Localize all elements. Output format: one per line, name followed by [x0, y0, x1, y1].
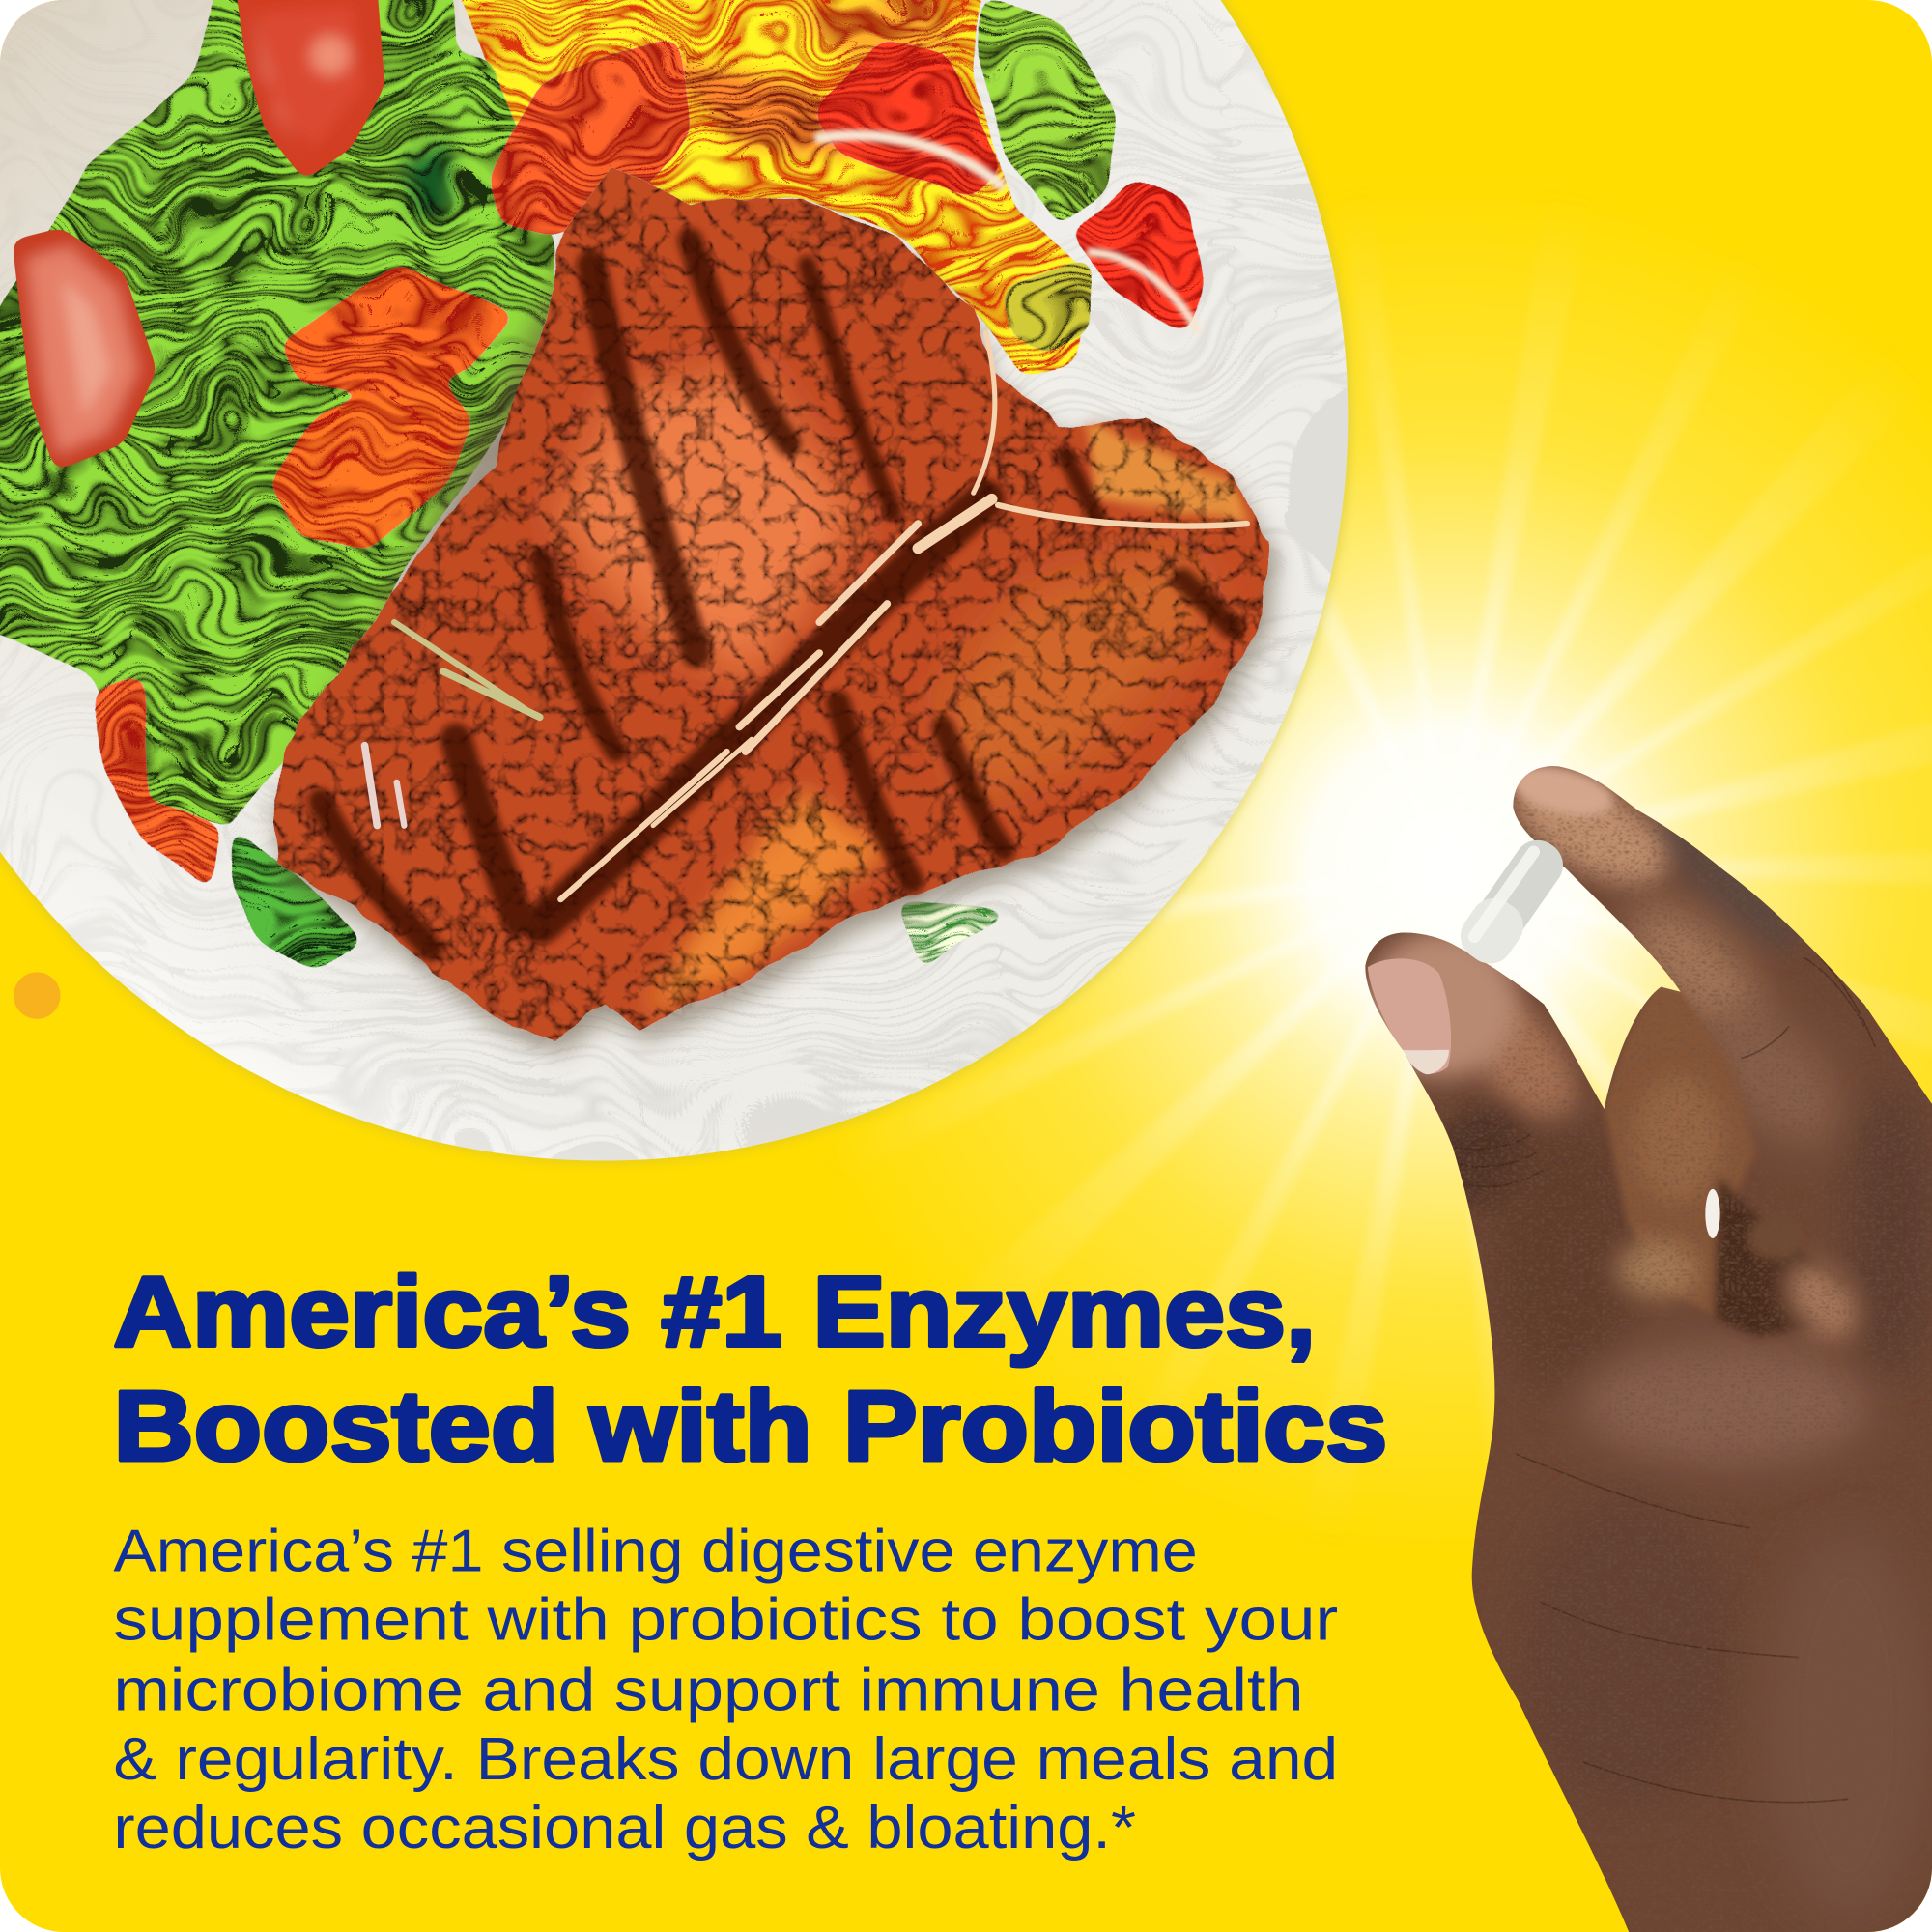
heading: Boosted with Probiotics — [113, 1369, 1387, 1481]
body text: reduces occasional gas & bloating.* — [113, 1794, 1136, 1861]
index fingertip highlight — [1507, 757, 1618, 825]
white bands on red petals — [819, 135, 1198, 330]
curled fingers — [1605, 987, 1872, 1353]
grill marks — [321, 241, 1233, 949]
hand holding capsule — [1343, 739, 1932, 1932]
heading — [113, 1255, 1387, 1481]
capsule — [1451, 830, 1575, 973]
hand shading — [1435, 749, 1932, 1922]
flame-textured garnish — [450, 0, 1091, 376]
body text: supplement with probiotics to boost your — [113, 1586, 1338, 1654]
body text — [113, 1517, 1338, 1861]
orange speck on background — [14, 972, 60, 1019]
plate with food — [0, 0, 1351, 1164]
light burst behind capsule — [681, 103, 1932, 1637]
tomato wedge left — [13, 228, 156, 470]
ring — [1705, 1189, 1720, 1238]
salad greens — [0, 0, 1115, 974]
bone highlights and herb sprigs — [365, 332, 1247, 899]
skin creases — [1453, 955, 1875, 1803]
carrot and tomato shapes — [93, 37, 1205, 894]
body text: microbiome and support immune health — [113, 1656, 1303, 1723]
body text: America’s #1 selling digestive enzyme — [113, 1517, 1198, 1584]
thumb tip and nail — [1365, 930, 1518, 1078]
heading: America’s #1 Enzymes, — [113, 1255, 1316, 1367]
grilled t-bone steak — [271, 166, 1275, 1054]
hand base skin — [1343, 739, 1932, 1932]
plate — [0, 0, 1351, 1164]
tomato wedge top — [234, 0, 384, 180]
body text: & regularity. Breaks down large meals and — [113, 1725, 1338, 1793]
